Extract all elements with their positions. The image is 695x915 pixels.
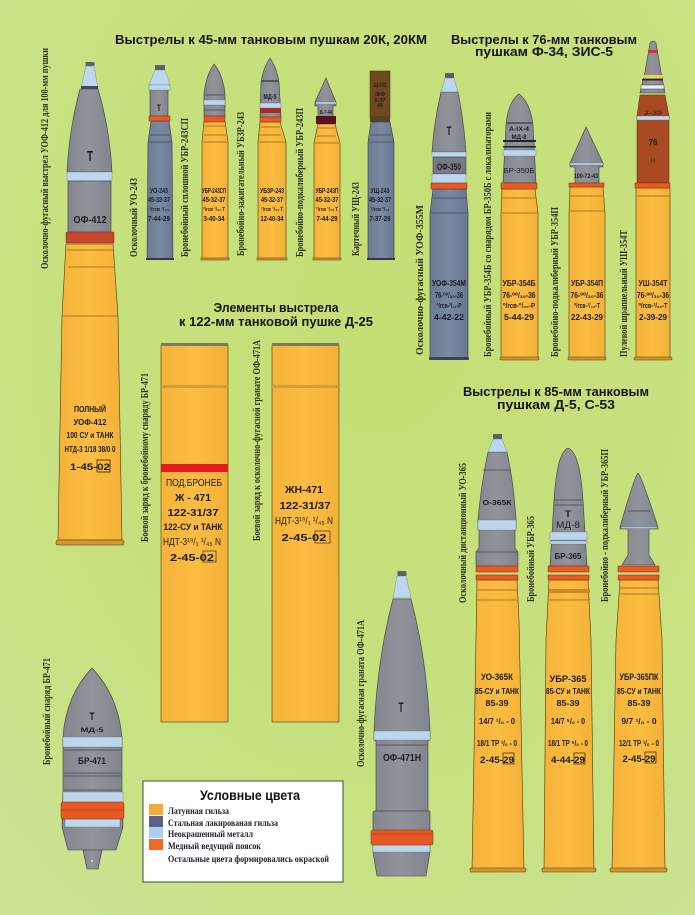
- title: 85 mm: [463, 384, 649, 412]
- vertical labels: Боевой заряд к осколочно-фугасной гранате ОФ-471А: [252, 339, 263, 541]
- case markings: УБР-354Б: 76-⁰⁰/₃₀-36: [502, 291, 536, 300]
- case markings: УБР-365ПК: 2-45-29: [622, 754, 656, 764]
- case markings: УОФ-412: 100 СУ и ТАНК: [66, 430, 114, 440]
- case markings: УО-365К: 85-39: [486, 699, 509, 708]
- shell: УШ-354Т: 76: [648, 137, 658, 147]
- case markings: УБР-354П: 76-⁰⁰/₃₀-36: [570, 291, 604, 300]
- legend item: bare metal: [149, 827, 253, 839]
- case markings: УБР-365: 4-44-29: [551, 755, 585, 765]
- title: 122 mm: Элементы выстрела: [214, 300, 339, 315]
- case markings: УБР-354Б: ⁰/гсв-⁰/₄₀-Р: [503, 302, 535, 310]
- shell: БР-471: Т: [90, 711, 95, 723]
- vertical labels: Бронебойно - подкалиберный УБР-365П: [600, 449, 611, 602]
- case markings: УБР-365ПК: [617, 672, 661, 764]
- shell: УБР-365: БР-365: [554, 551, 582, 561]
- case markings: УБР-354Б: УБР-354Б: [502, 278, 536, 288]
- charge case: ЖН-471: [272, 343, 339, 722]
- brown case markings: 46: [377, 103, 383, 109]
- case markings: УБР-354Б: [502, 278, 536, 322]
- case: УО-243: [147, 121, 173, 259]
- case markings: УБР-365: [546, 674, 590, 765]
- markings: Ж-471: 2-45-02: [170, 553, 215, 564]
- shell: УОФ-354М: [429, 73, 469, 360]
- shell: УОФ-354М: ОФ-350: [437, 162, 461, 173]
- case markings: УШ-354Т: 76-⁰⁰/₃₀-36: [637, 291, 669, 300]
- case markings: УБР-354Б: 5-44-29: [504, 312, 534, 322]
- shell: УОФ-412: [56, 62, 124, 545]
- case markings: УЩ-243: УЩ-243: [370, 186, 390, 195]
- vertical labels: [40, 48, 630, 767]
- case markings: УОФ-412: УОФ-412: [74, 417, 107, 427]
- shell: БР-471: БР-471: [78, 756, 106, 766]
- legend item: brass: [149, 804, 229, 816]
- ogive: УОФ-412: [67, 89, 112, 172]
- case markings: УО-243: 45-32-37: [148, 195, 170, 204]
- case markings: УЩ-243: ⁷/гсв ¹/₄₄: [370, 206, 390, 213]
- legend item: brass: Латунная гильза: [168, 806, 229, 816]
- legend item: steel: [149, 816, 278, 828]
- charge case: Ж-471: [161, 343, 228, 722]
- case markings: УБР-365ПК: 85-СУ и ТАНК: [617, 687, 661, 696]
- case markings: УОФ-354М: УОФ-354М: [432, 278, 466, 288]
- case markings: УОФ-412: НТД-3 1/18 38/0 0: [64, 444, 116, 454]
- case markings: УОФ-354М: 4-42-22: [434, 312, 464, 322]
- case markings: УБР-243СП: 45-32-37: [202, 195, 226, 204]
- case markings: УБР-243П: УБР-243П: [316, 186, 338, 195]
- case markings: УБР-243П: 45-32-37: [316, 195, 338, 204]
- shell: УБР-365: Т: [565, 509, 572, 519]
- shell: УБР-354П: 100-72-43: [574, 173, 598, 180]
- shell: УШ-354Т: [634, 41, 672, 360]
- shell: БР-471: МД-5: [80, 727, 104, 734]
- title: 76 mm: Выстрелы к 76-мм танковым: [451, 32, 637, 47]
- case markings: УБЗР-243: [260, 186, 284, 223]
- markings: ЖН-471: [275, 485, 333, 544]
- case markings: УБР-243П: 7-44-29: [316, 214, 338, 223]
- case markings: УО-365К: 18/1 ТР ¹/₀ - 0: [477, 739, 517, 748]
- case markings: УБЗР-243: 45-32-37: [261, 195, 283, 204]
- case markings: УБЗР-243: 12-40-34: [260, 214, 284, 223]
- shell: УБР-365П: [610, 473, 667, 872]
- case markings: УШ-354Т: ⁰/гсв-²/₃₉-Т: [638, 302, 668, 310]
- vertical labels: Осколочно-фугасный выстрел УОФ-412 для 100-мм пушки: [40, 48, 51, 269]
- shell: ОФ-471Н: [371, 571, 433, 876]
- case markings: УБР-365: 85-СУ и ТАНК: [546, 687, 590, 696]
- case markings: УО-243: ⁷/гсв ¹/₄₄: [149, 206, 169, 213]
- case markings: УБР-354П: 22-43-29: [571, 312, 603, 322]
- case markings: УО-243: УО-243: [150, 186, 168, 195]
- copper band: [66, 232, 114, 243]
- case markings: УБР-354П: [570, 278, 604, 322]
- case markings: УО-365К: 85-СУ и ТАНК: [475, 687, 519, 696]
- case markings: УБР-354П: УБР-354П: [571, 278, 603, 288]
- case markings: УОФ-412: ПОЛНЫЙ: [74, 403, 106, 414]
- vertical labels: Бронебойно-подкалиберный УБР-243П: [295, 108, 306, 257]
- markings: ЖН-471: 122-31/37: [280, 501, 331, 512]
- vertical labels: Осколочно-фугасный УОФ-355М: [415, 204, 426, 355]
- title: 76 mm: пушкам Ф-34, ЗИС-5: [475, 44, 613, 59]
- shell: УБР-243П: Б-7-44: [320, 110, 332, 116]
- vertical labels: Осколочный УО-243: [129, 178, 140, 257]
- shell: УО-243: [146, 65, 174, 260]
- case markings: УБР-365ПК: УБР-365ПК: [620, 672, 659, 682]
- copper band: [61, 802, 124, 819]
- markings: Ж-471: 122-31/37: [168, 508, 219, 519]
- case: УОФ-412: [58, 244, 122, 540]
- shell: УБР-354Б: А-IX-4: [509, 127, 530, 133]
- markings: ЖН-471: НДТ-3¹⁹/₁ ¹/₄₅ N: [275, 516, 333, 527]
- legend note: Остальные цвета формировались окраской: [168, 854, 329, 864]
- case markings: УЩ-243: [369, 186, 391, 223]
- case markings: УО-243: [148, 186, 170, 223]
- shell: ОФ-471Н: Т: [398, 699, 404, 715]
- vertical labels: Бронебойный УБР-354Б со снарядом БР-350Б с локализаторами: [483, 112, 494, 357]
- markings: ЖН-471: ЖН-471: [284, 485, 323, 496]
- legend item: copper: Медный ведущий поясок: [168, 841, 262, 851]
- case markings: УБР-365: 18/1 ТР ⁵/₀ - 0: [548, 739, 588, 748]
- vertical labels: Бронебойный УБР-365: [526, 516, 537, 602]
- case markings: УОФ-412: [64, 403, 116, 473]
- shell: УОФ-412: ОФ-412: [74, 214, 107, 226]
- shell: УШ-354Т: Н: [650, 158, 656, 165]
- shell: УОФ-412: Т: [87, 148, 93, 165]
- shell: УБР-354Б: БР-350Б: [504, 166, 535, 175]
- case markings: УБР-365ПК: 85-39: [628, 699, 651, 708]
- vertical labels: Боевой заряд к бронебойному снаряду БР-471: [140, 373, 151, 542]
- shell: УБЗР-243: МД-5: [264, 94, 277, 101]
- case markings: УБР-243П: ⁷/гсв ¹/₄₄ Т: [316, 206, 339, 213]
- case markings: УОФ-354М: ⁰/гсв-²/₄₂-Р: [436, 302, 462, 310]
- legend item: copper: [149, 839, 262, 851]
- case markings: УБР-365: 85-39: [556, 699, 580, 708]
- case markings: УО-365К: 14/7 ¹/₀ - 0: [479, 717, 516, 726]
- title: 85 mm: Выстрелы к 85-мм танковым: [463, 384, 649, 399]
- case markings: УОФ-354М: 76-⁰⁰/₃₀-36: [435, 291, 463, 300]
- legend item: steel: Стальная лакированая гильза: [168, 818, 278, 828]
- brown case markings: [374, 82, 386, 109]
- shell: УОФ-354М: Т: [446, 124, 452, 138]
- case markings: УБР-365: 14/7 ⁵/₀ - 0: [551, 717, 585, 726]
- case markings: УБР-354П: ⁰/гсв-⁷/₄₄-Т: [574, 302, 601, 310]
- title: 122 mm: к 122-мм танковой пушке Д-25: [179, 314, 373, 329]
- case markings: УО-243: 7-44-29: [148, 214, 170, 223]
- case markings: УЩ-243: 45-32-37: [369, 195, 391, 204]
- shell: УБР-354Б: [500, 94, 539, 360]
- shell: УБЗР-243: [257, 58, 287, 260]
- case markings: УО-365К: УО-365К: [481, 672, 513, 682]
- markings: Ж-471: ПОД.БРОНЕБ: [166, 478, 222, 489]
- case markings: УБР-243СП: [202, 186, 226, 223]
- title: 85 mm: пушкам Д-5, С-53: [497, 397, 615, 412]
- case markings: УО-365К: 2-45-29: [480, 755, 514, 765]
- vertical labels: Бронебойный сплошной УБР-243СП: [180, 118, 191, 257]
- shell: УЩ-243: [367, 71, 395, 260]
- shell: УШ-354Т: 2-39: [644, 110, 663, 117]
- case markings: УШ-354Т: УШ-354Т: [638, 278, 668, 288]
- vertical labels: Осколочный дистанционный УО-365: [458, 463, 469, 603]
- case markings: УБР-365ПК: 12/1 ТР ¹/₀ - 0: [619, 739, 659, 748]
- case markings: УЩ-243: 7-37-29: [370, 214, 390, 223]
- brown case markings: Щ-243: [374, 82, 386, 89]
- brown case markings: 5-37: [374, 98, 386, 104]
- vertical labels: Бронебойно-зажигательный УБЗР-243: [236, 112, 247, 256]
- shell: УБР-365: [542, 448, 596, 872]
- markings: Ж-471: Ж - 471: [174, 493, 211, 504]
- markings: Ж-471: [163, 478, 223, 564]
- markings: ЖН-471: 2-45-02: [282, 533, 327, 544]
- case markings: УБР-365: УБР-365: [550, 674, 586, 684]
- vertical labels: Осколочно-фугасная граната ОФ-471А: [356, 619, 367, 767]
- shell: УБР-354П: [568, 127, 606, 360]
- title: 122 mm: [179, 300, 373, 329]
- case markings: УБЗР-243: УБЗР-243: [260, 186, 284, 195]
- vertical labels: Пулевой шрапнельный УШ-354Т: [619, 230, 630, 357]
- shell: УБР-354Б: МД-8: [512, 135, 527, 141]
- legend: [143, 781, 343, 882]
- vertical labels: Бронебойный снаряд БР-471: [42, 658, 53, 765]
- vertical labels: Бронебойно-подкалиберный УБР-354П: [550, 207, 561, 357]
- shell: УБР-243СП: [201, 64, 229, 260]
- case markings: УБР-243П: [316, 186, 339, 223]
- shell: УО-243: Т: [157, 103, 161, 113]
- case markings: УБР-365ПК: 9/7 ¹/₀ - 0: [622, 717, 657, 726]
- vertical labels: Картечный УЩ-243: [351, 182, 362, 256]
- brown case markings: ЗКФ: [375, 92, 386, 98]
- copper band: [371, 830, 433, 845]
- case markings: УОФ-354М: [432, 278, 466, 322]
- shell: УО-365: О-365К: [482, 498, 512, 507]
- shell: УО-365: [470, 434, 526, 872]
- case markings: УБР-243СП: 3-40-34: [204, 214, 225, 223]
- legend item: bare metal: Неокрашенный металл: [168, 829, 253, 839]
- case markings: УШ-354Т: [637, 278, 669, 322]
- shell: УБР-243П: [313, 78, 341, 260]
- shell: ОФ-471Н: ОФ-471Н: [383, 752, 421, 764]
- shell: УБР-365: МД-8: [556, 520, 580, 530]
- shell: БР-471: [61, 668, 124, 869]
- case markings: УБР-243СП: ⁷/гсв ¹/₄₄ Т: [203, 206, 226, 213]
- title: 76 mm: [451, 32, 637, 59]
- markings: Ж-471: НДТ-3¹⁹/₁ ¹/₄₅ N: [163, 537, 221, 548]
- case markings: УБЗР-243: ⁷/гсв ¹/₄₄ Т: [261, 206, 284, 213]
- case markings: УБР-243СП: УБР-243СП: [202, 186, 226, 195]
- legend title: Условные цвета: [200, 787, 300, 803]
- case markings: УШ-354Т: 2-39-29: [639, 312, 667, 322]
- title: 45 mm: Выстрелы к 45-мм танковым пушкам 20К, 20КМ: [115, 32, 427, 47]
- markings: Ж-471: 122-СУ и ТАНК: [164, 522, 223, 532]
- case markings: УОФ-412: 1-45-02: [70, 462, 110, 473]
- case markings: УО-365К: [475, 672, 519, 765]
